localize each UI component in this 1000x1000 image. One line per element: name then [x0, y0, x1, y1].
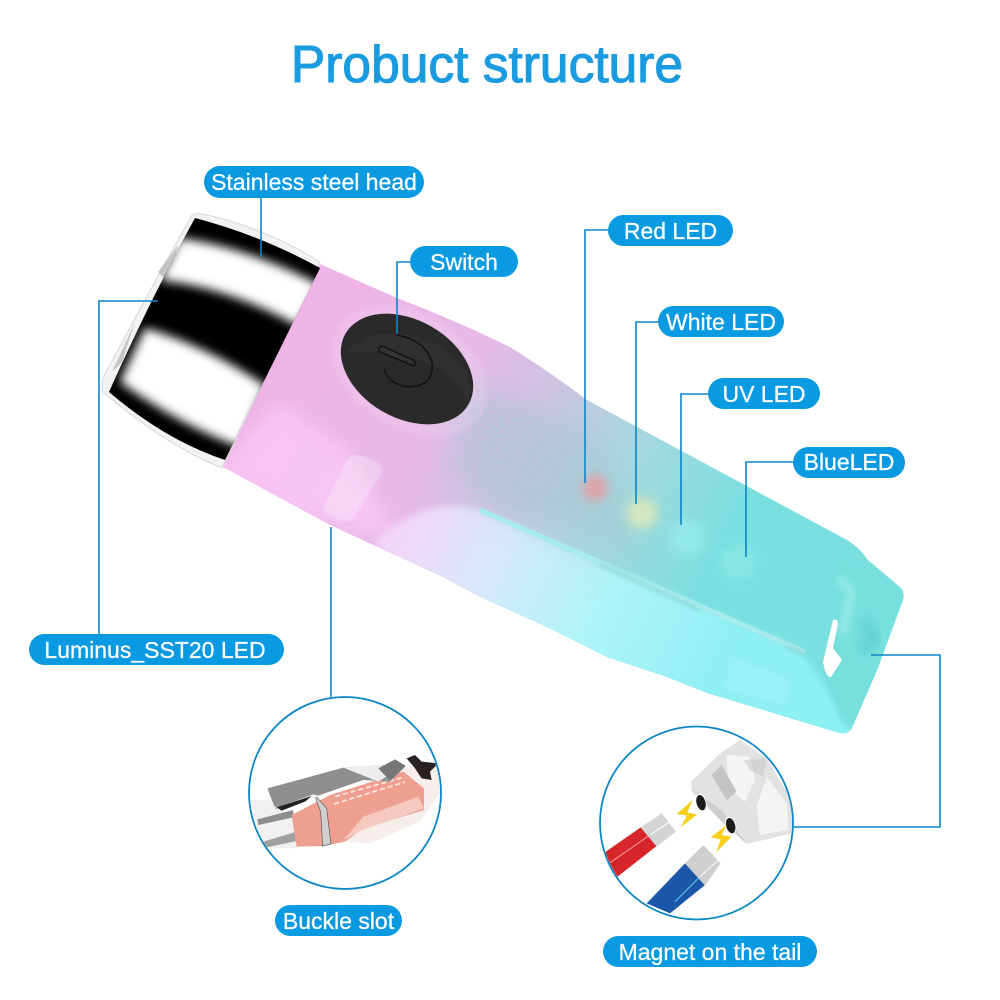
label: switch [410, 246, 518, 277]
label: stainless steel head: Stainless steel head [211, 169, 417, 195]
flashlight body [223, 264, 904, 734]
label: switch: Switch [430, 249, 498, 275]
red magnet [603, 827, 657, 880]
stainless steel head [102, 213, 320, 468]
label: red LED [608, 215, 733, 246]
detail circle: magnet on the tail [600, 726, 794, 920]
pink sleeve [292, 772, 424, 847]
blue magnet [647, 863, 705, 913]
label: white LED: White LED [666, 309, 776, 335]
detail circle: buckle slot [247, 697, 443, 889]
magnet holes [696, 794, 707, 810]
keychain hole [823, 620, 842, 677]
label: red LED: Red LED [624, 218, 717, 244]
label: UV LED [708, 378, 820, 409]
black tip [407, 755, 438, 780]
label: blue LED: BlueLED [804, 449, 894, 475]
lower facet ridge [480, 510, 805, 652]
clip band [314, 794, 331, 846]
pocket clip [267, 759, 406, 811]
leader lines [99, 198, 940, 827]
label: Luminus SST20 LED: Luminus_SST20 LED [44, 637, 266, 663]
label: blue LED [793, 447, 905, 478]
label: magnet on the tail: Magnet on the tail [619, 939, 801, 965]
tail loop [834, 582, 904, 728]
power icon [379, 335, 432, 387]
switch recess [309, 280, 511, 462]
buckle slot recess [324, 455, 382, 521]
title: Probuct structure [291, 35, 683, 93]
soft pink highlight [224, 407, 388, 534]
translucent tail [343, 763, 443, 843]
frosted texture [445, 385, 640, 565]
switch button [321, 291, 493, 447]
LED spots [582, 475, 756, 581]
label: buckle slot: Buckle slot [283, 908, 395, 934]
label: UV LED: UV LED [722, 381, 806, 407]
pen barrel [247, 800, 298, 848]
tail piece [691, 740, 794, 844]
lower facet of body [376, 504, 852, 734]
flashlight [102, 213, 920, 760]
lightning bolts [677, 800, 697, 827]
